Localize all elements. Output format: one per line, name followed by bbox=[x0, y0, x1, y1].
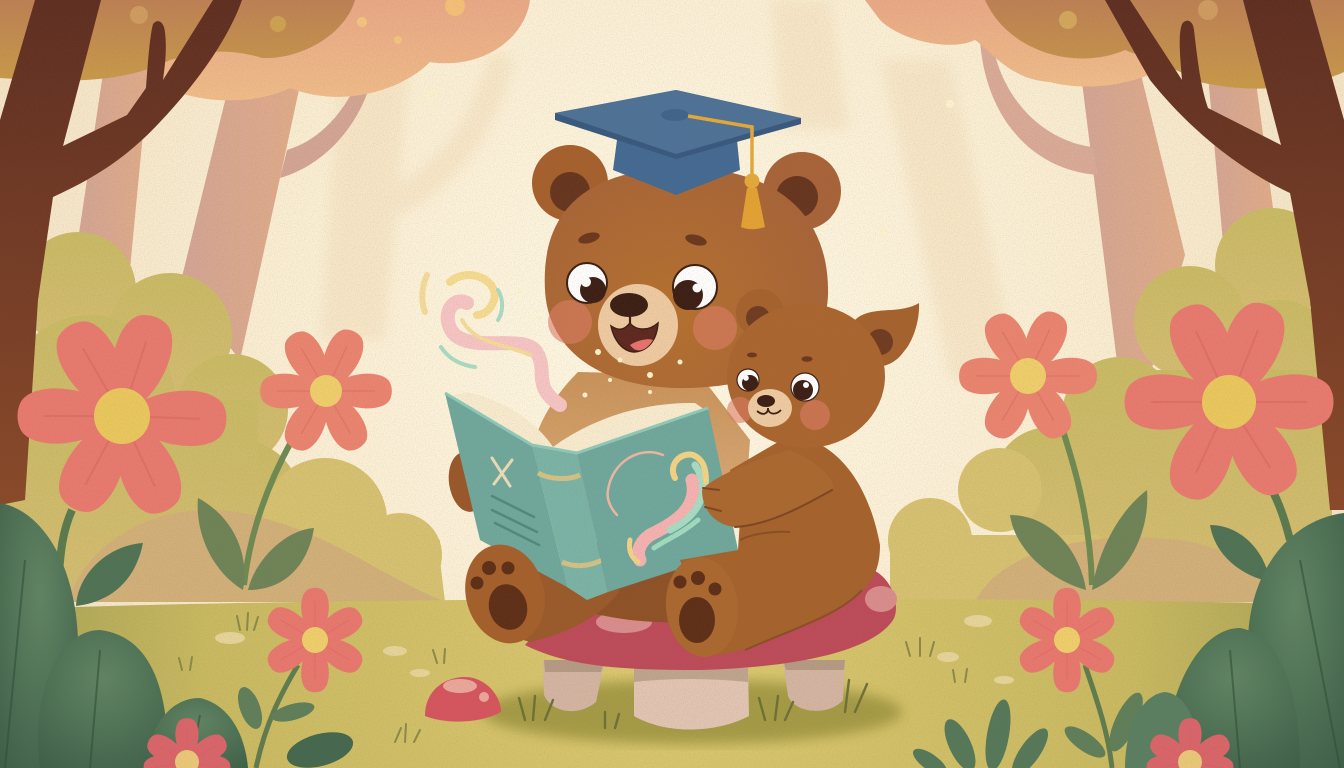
grass and pebbles bbox=[179, 613, 1014, 742]
big bear nose and mouth bbox=[610, 293, 658, 352]
faint distant trees bbox=[320, 0, 1020, 380]
book right cover swirl bbox=[608, 452, 706, 562]
big bear ears bbox=[532, 145, 841, 230]
open book bbox=[445, 392, 738, 600]
cub eyebrows bbox=[747, 352, 812, 362]
magic swirl bbox=[422, 275, 560, 405]
ground bbox=[0, 599, 1344, 768]
flower: ground left bbox=[233, 588, 367, 768]
cub body and big bear right leg bbox=[680, 435, 880, 655]
flower: large right bbox=[1124, 295, 1334, 582]
mushroom stems bbox=[543, 660, 845, 730]
right bushes bbox=[888, 208, 1340, 602]
book left cover bbox=[445, 393, 567, 587]
background trunks left bbox=[78, 60, 372, 360]
flower: ground right bbox=[1015, 588, 1149, 768]
big bear head bbox=[545, 168, 828, 388]
canopy left bbox=[0, 0, 530, 100]
big bear left leg bbox=[490, 560, 620, 642]
mushroom cap bbox=[525, 569, 896, 670]
big bear eyes bbox=[567, 263, 717, 310]
graduation cap bbox=[555, 90, 801, 229]
eyebrows bbox=[577, 230, 708, 248]
flower: right small bbox=[959, 306, 1147, 590]
big bear bbox=[445, 145, 841, 642]
big bear left paw bbox=[445, 450, 489, 514]
cub muzzle bbox=[748, 389, 792, 427]
cheeks bbox=[548, 300, 737, 350]
book left cover decoration bbox=[492, 458, 539, 545]
cub body and leg shadow line bbox=[740, 532, 862, 650]
foreground leaves left bbox=[0, 503, 248, 768]
flower: large left bbox=[18, 308, 227, 606]
big bear left foot bbox=[454, 536, 556, 652]
cub eyes bbox=[737, 369, 819, 401]
cub head bbox=[727, 304, 885, 448]
big bear right foot bbox=[661, 554, 743, 660]
ground shadow under mushroom bbox=[482, 680, 902, 744]
sparkles bbox=[426, 88, 954, 398]
cub arm bbox=[702, 450, 833, 527]
book pages bbox=[450, 392, 708, 456]
flower: bottom right corner bbox=[1145, 718, 1235, 768]
cub nose bbox=[757, 395, 781, 414]
book right cover bbox=[577, 408, 738, 592]
cub ears bbox=[736, 289, 919, 367]
foreground tree right bbox=[1105, 0, 1344, 510]
foreground tree left bbox=[0, 0, 242, 505]
left bushes bbox=[0, 232, 445, 602]
big bear muzzle bbox=[598, 284, 678, 366]
grass tufts around stems bbox=[519, 680, 867, 728]
small red mushroom bbox=[425, 677, 501, 722]
small plant bottom centre bbox=[909, 698, 1054, 768]
canopy right bbox=[865, 0, 1344, 89]
book spine bbox=[532, 445, 608, 600]
big bear chest bbox=[530, 372, 750, 530]
big bear lower body bbox=[530, 540, 730, 622]
background trunks right bbox=[980, 40, 1274, 375]
foreground leaves right bbox=[1125, 513, 1344, 768]
mushroom seat bbox=[519, 569, 897, 730]
flower: left small bbox=[198, 324, 392, 590]
flower: bottom left corner bbox=[142, 718, 232, 768]
cub bear bbox=[661, 289, 919, 660]
